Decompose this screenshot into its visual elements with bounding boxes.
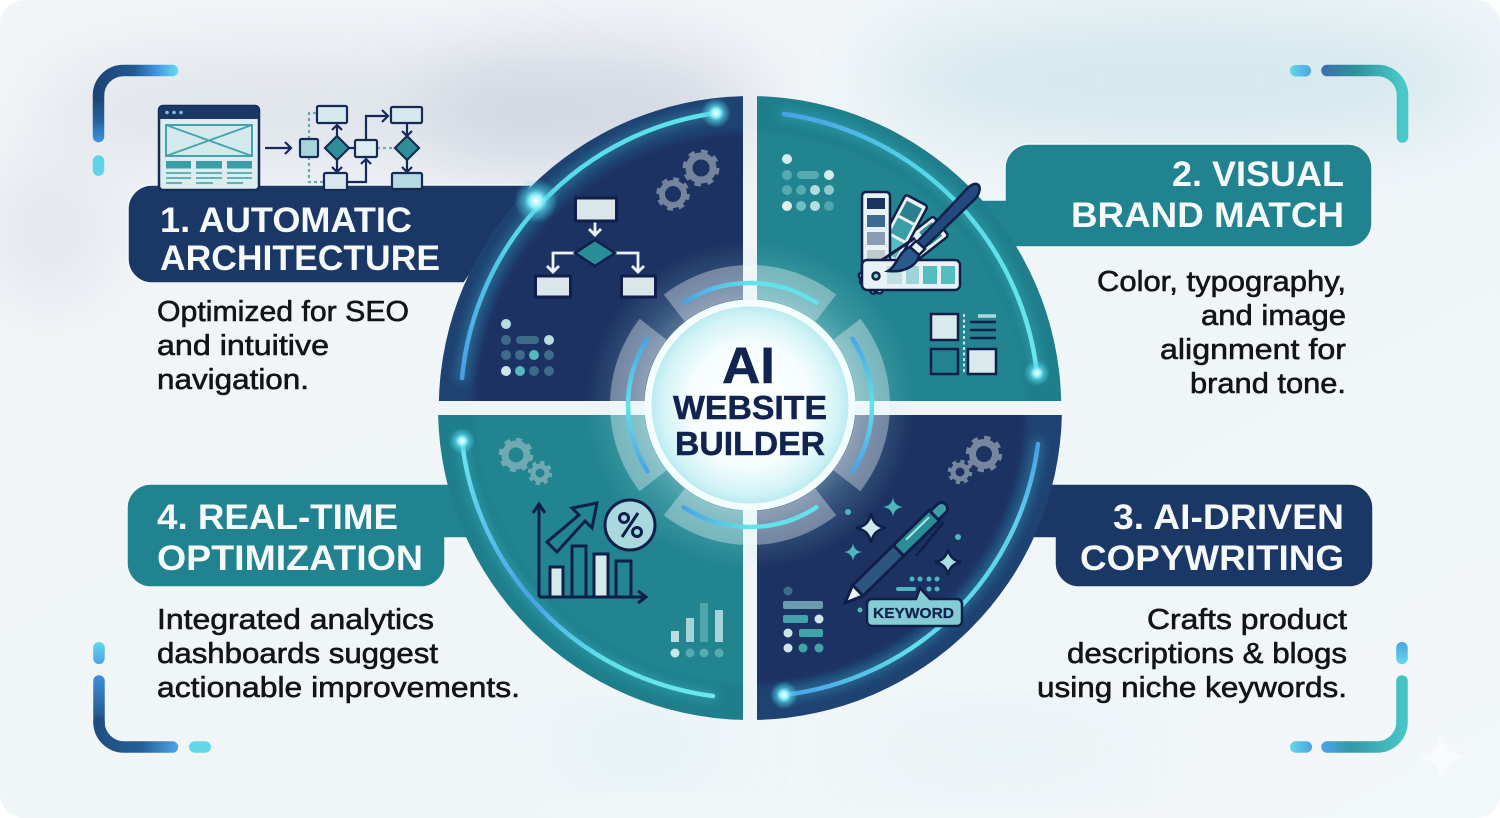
quadrant: top left [439,96,743,401]
callout: keyword [867,576,962,626]
glowing arc: bottom left [449,428,713,696]
icon: data dots quadrant 1 [501,319,554,376]
hub circle and title [648,303,852,507]
corner bracket: top left [98,70,172,170]
icon: pen [840,499,951,608]
text: description 4: Integrated analytics [157,604,434,636]
text: description 1: Optimized for SEO [157,296,409,328]
quadrant: bottom left [438,415,743,720]
icon: data list [783,586,824,652]
arrow: wireframe to flowchart [265,142,291,154]
heading: 1. Automatic Architecture [160,201,440,278]
corner bracket: bottom left [93,642,211,753]
panel: label 4 background [127,484,475,587]
text: description 3: using niche keywords. [1037,672,1347,704]
quadrant: top right [757,96,1061,401]
icon: sitemap flowchart [300,106,422,190]
heading: 2. Visual Brand Match: BRAND MATCH [1071,196,1344,235]
heading: 2. Visual Brand Match: 2. VISUAL [1172,155,1344,194]
icon: gears quadrant 4 [501,440,550,484]
icon: gears quadrant 1 [658,152,717,208]
central wheel [438,96,1062,720]
text: description 1: and intuitive [157,330,329,362]
icon: data dots quadrant 2 [782,154,834,211]
watermark sparkle [1416,732,1466,782]
text: description 2: alignment for [1160,334,1346,366]
icon: layout grid [931,314,996,374]
text: description 2: brand tone. [1190,368,1346,400]
heading: 4. Real-Time Optimization: OPTIMIZATION [157,539,423,578]
text: description 2: and image [1201,300,1346,332]
hub segments [610,265,890,545]
heading: 3. AI-Driven Copywriting: 3. AI-DRIVEN [1113,498,1344,537]
panel: label 2 background [970,144,1372,247]
hub glow [585,240,915,570]
heading: 4. Real-Time Optimization: 4. REAL-TIME [157,498,398,537]
heading: 4. Real-Time Optimization [157,498,423,578]
text: description 1 [157,296,409,396]
inner shade: bottom right [757,415,1026,684]
icon: growth chart [533,500,655,603]
inner shade: bottom left [474,132,1026,684]
callout: keyword: KEYWORD [873,605,954,622]
icon: website wireframe [159,106,259,190]
glowing arc: bottom right [770,444,1038,709]
text: description 3: descriptions & blogs [1067,638,1347,670]
title: WEBSITE: WEBSITE [673,389,827,426]
text: description 2 [1097,266,1346,400]
glowing arc: top left [462,98,731,378]
heading: 1. Automatic Architecture: 1. AUTOMATIC [160,201,412,240]
corner bracket: bottom right [1290,642,1408,753]
icon: sparkles [844,497,961,612]
inner shade: top left [474,132,743,401]
quadrant: bottom right [757,415,1062,720]
text: description 4 [157,604,520,704]
panel: label 3 background [1025,484,1373,587]
heading: 2. Visual Brand Match [1071,155,1344,235]
glowing arc: top right [784,114,1050,386]
heading: 3. AI-Driven Copywriting: COPYWRITING [1080,539,1344,578]
icon: gears quadrant 3 [950,438,1000,482]
text: description 3 [1037,604,1347,704]
icon: colour swatches and brush [858,184,980,295]
title: AI: AI [722,337,775,394]
hub arcs [628,283,872,527]
icon: decision flowchart [536,198,656,297]
text: description 3: Crafts product [1147,604,1347,636]
title: BUILDER: BUILDER [675,425,825,462]
inner shade: top right [474,132,1026,684]
corner bracket: top right [1290,65,1403,137]
text: description 1: navigation. [157,364,309,396]
panel: label 1 background [128,185,532,283]
icon: mini bars [670,603,724,658]
text: description 2: Color, typography, [1097,266,1346,298]
heading: 3. AI-Driven Copywriting [1080,498,1344,578]
text: description 4: dashboards suggest [157,638,438,670]
text: description 4: actionable improvements. [157,672,520,704]
heading: 1. Automatic Architecture: ARCHITECTURE [160,239,440,278]
